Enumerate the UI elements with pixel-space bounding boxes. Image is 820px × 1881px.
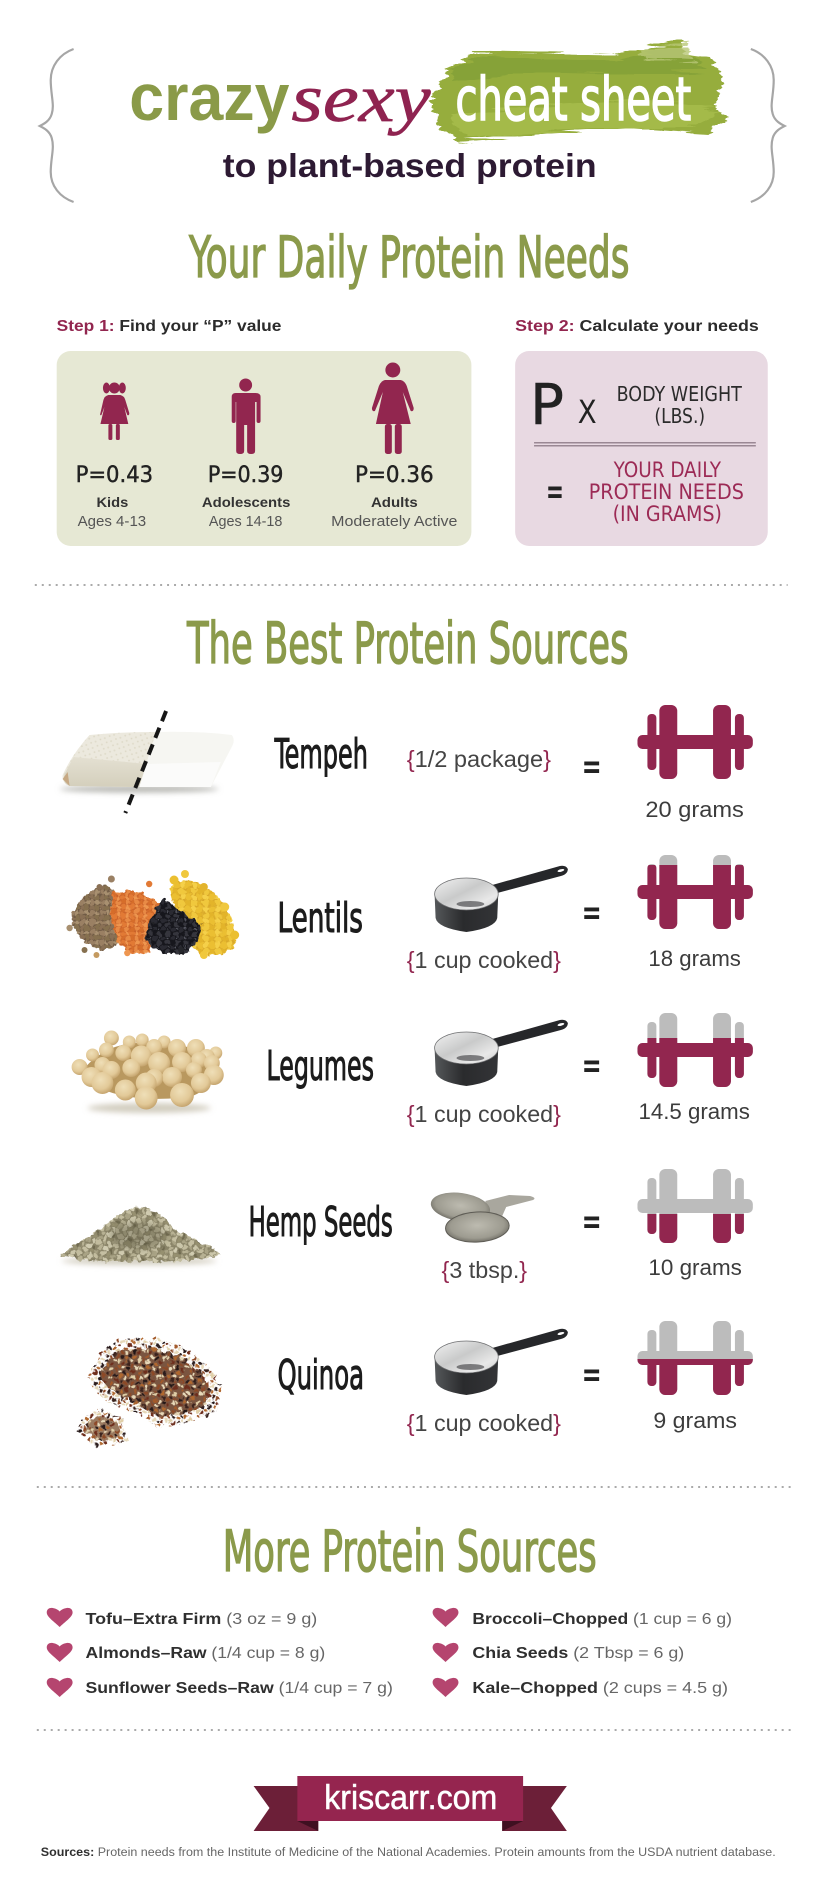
step 2 label: Step 2: Calculate your needs [515,318,759,335]
P value: adolescents: P=0.39 [208,463,283,488]
equals sign: = [582,747,602,786]
row: hemp seeds [60,1169,753,1283]
dumbbell: 9 of 20 [637,1321,753,1395]
label: ages 14-18: Ages 14-18 [209,514,282,530]
equals sign: = [582,1046,602,1085]
sources footnote: Sources: Protein needs from the Institute of Medicine of the National Academies. Protein amounts from the USDA nutrient database. [41,1845,776,1859]
formula: times: X [578,393,597,431]
list: more protein sources [47,1608,732,1697]
image: chickpeas [72,1030,224,1113]
serving: half package: {1/2 package} [407,746,551,772]
amount: 9 grams: 9 grams [653,1408,737,1433]
banner text: kriscarr.com [324,1779,497,1817]
brace: left [40,49,74,202]
list item: broccoli: Broccoli–Chopped (1 cup = 6 g) [472,1611,732,1628]
icon: measuring cup [435,866,568,932]
food name: hemp seeds: Hemp Seeds [249,1198,393,1246]
title word: sexy: sexy [291,61,432,136]
list item: almonds: Almonds–Raw (1/4 cup = 8 g) [86,1645,325,1662]
panel: calculate your needs [515,351,768,546]
dumbbell: 18 of 20 [637,855,753,929]
green paint brush swash [431,40,729,142]
list item: kale: Kale–Chopped (2 cups = 4.5 g) [472,1680,728,1697]
formula: P: P [530,373,564,438]
formula: lbs: (LBS.) [654,404,705,428]
result: in grams: (IN GRAMS) [613,502,722,526]
formula: equals: = [546,472,564,511]
list item: sunflower seeds: Sunflower Seeds–Raw (1/4 cup = 7 g) [86,1680,393,1697]
icon: adolescent [232,378,261,454]
food name: legumes: Legumes [267,1042,374,1090]
row: tempeh [60,705,753,822]
equals sign: = [582,1202,602,1241]
list item: tofu [47,1608,317,1628]
icon: adult woman [372,362,414,454]
amount: 20 grams: 20 grams [645,797,744,822]
header: title lockup [40,40,785,202]
result: your daily: YOUR DAILY [613,458,721,482]
equals sign: = [582,1355,602,1394]
step 1 label: Step 1: Find your “P” value [57,318,282,335]
dumbbell: 10 of 20 [637,1169,753,1243]
dumbbell: full [637,705,753,779]
amount: 10 grams: 10 grams [648,1255,742,1280]
serving: 3 tbsp: {3 tbsp.} [442,1257,527,1283]
label: ages 4-13: Ages 4-13 [78,514,146,530]
food name: lentils: Lentils [277,894,363,942]
food name: quinoa: Quinoa [277,1351,364,1399]
list item: chia seeds: Chia Seeds (2 Tbsp = 6 g) [472,1645,684,1662]
label: moderately active: Moderately Active [331,514,457,530]
brace: right [751,49,785,202]
panel: find your P value [57,351,471,546]
image: lentils [66,870,239,959]
image: tempeh block [60,711,234,813]
label: adolescents: Adolescents [202,494,291,510]
food name: tempeh: Tempeh [274,730,368,778]
title word: crazy: crazy [129,60,290,134]
P value: adults: P=0.36 [355,463,434,488]
dumbbell: 14.5 of 20 [637,1013,753,1087]
ribbon banner: kriscarr.com [254,1776,567,1831]
formula: body weight: BODY WEIGHT [617,382,743,406]
list item: tofu: Tofu–Extra Firm (3 oz = 9 g) [86,1611,317,1628]
row: lentils [66,855,753,973]
serving: 1 cup cooked: {1 cup cooked} [407,1101,561,1127]
P value: kids: P=0.43 [76,463,153,488]
serving: 1 cup cooked: {1 cup cooked} [407,947,561,973]
image: hemp seed pile [60,1207,221,1265]
icon: girl [100,382,129,440]
icon: measuring cup [435,1020,568,1086]
label: kids: Kids [96,494,129,510]
icon: measuring cup [435,1329,568,1395]
amount: 14.5 grams: 14.5 grams [638,1099,750,1124]
image: quinoa seeds [78,1337,222,1447]
label: adults: Adults [371,494,418,510]
title words: cheat sheet: cheat sheet [455,65,691,135]
subtitle: to plant-based protein [223,147,597,184]
heading: more protein sources: More Protein Sources [223,1519,597,1585]
serving: 1 cup cooked: {1 cup cooked} [407,1410,561,1436]
heading: your daily protein needs: Your Daily Protein Needs [188,225,630,291]
equals sign: = [582,893,602,932]
heading: the best protein sources: The Best Protein Sources [186,611,629,677]
row: legumes [72,1013,753,1127]
row: quinoa [78,1321,753,1447]
result: protein needs: PROTEIN NEEDS [589,480,744,504]
amount: 18 grams: 18 grams [648,946,741,971]
icon: measuring spoons [429,1189,534,1244]
